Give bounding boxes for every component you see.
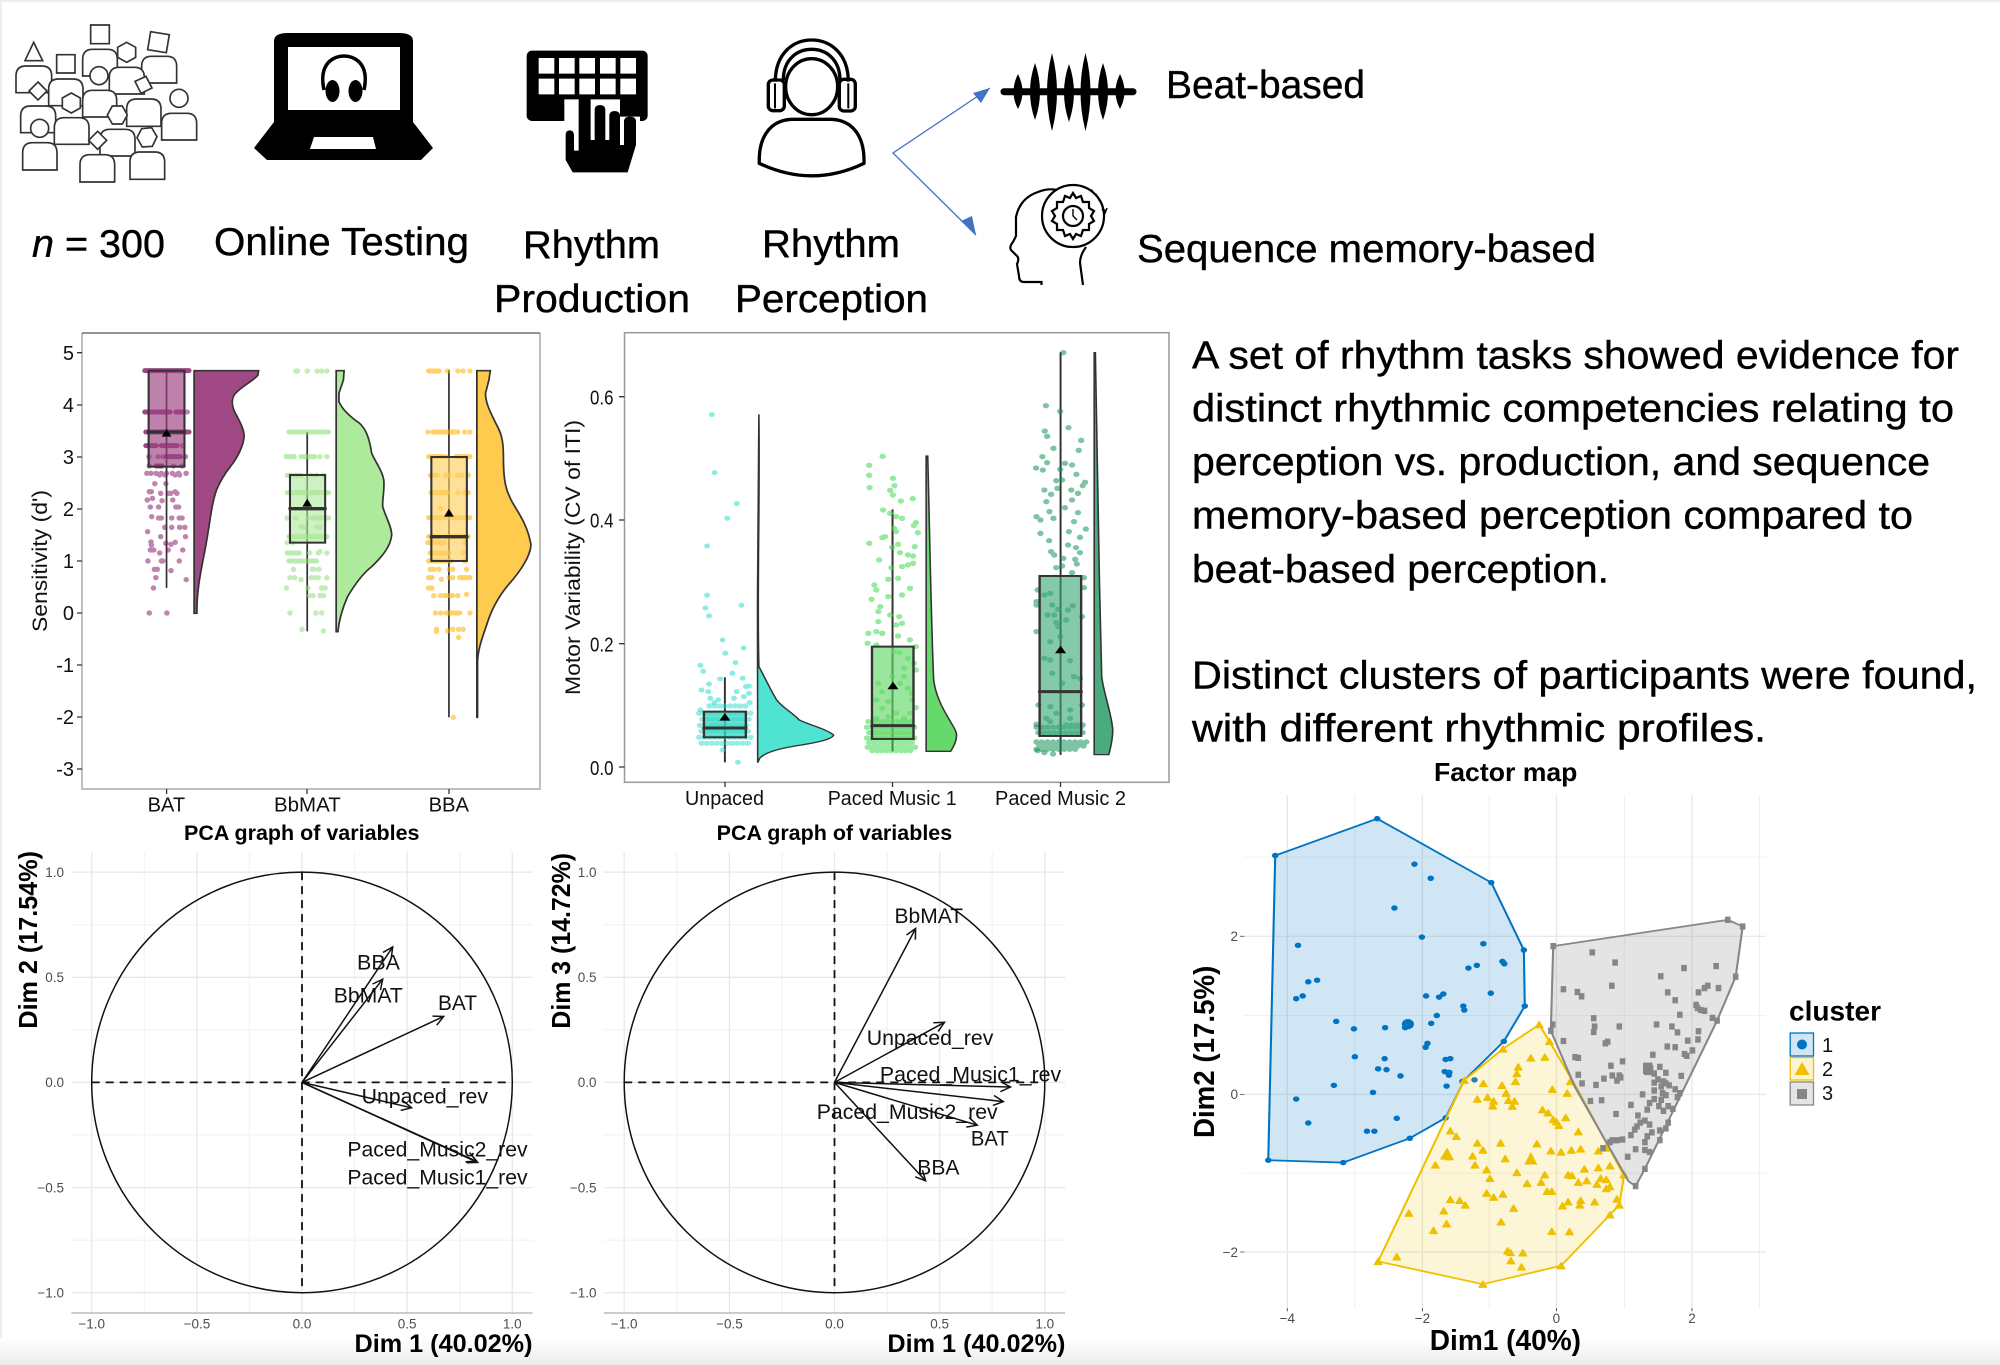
chart title: PCA graph of variables: [184, 822, 420, 845]
label: beat-based: Beat-based: [1166, 64, 1365, 107]
icon: laptop with headphones: [254, 33, 433, 160]
tick labels: 1.0: [1035, 1316, 1054, 1332]
tick labels: 0.5: [578, 970, 596, 985]
x axis labels: Paced Music 1: [828, 788, 957, 810]
icon: person with headphones: [759, 40, 864, 176]
y axis ticks: 1: [63, 551, 74, 573]
y axis ticks: 3: [63, 447, 74, 469]
label: rhythm production: [494, 224, 690, 321]
legend: [1789, 996, 1881, 1105]
y axis ticks: 0.4: [590, 510, 614, 532]
tick labels: 0.5: [45, 970, 64, 985]
grid: [604, 852, 1065, 1313]
tick labels: 1.0: [45, 865, 64, 880]
text block: findings: [1192, 334, 1959, 591]
text block: findings: beat-based perception.: [1192, 548, 1609, 591]
tick labels: 0.5: [930, 1316, 949, 1332]
legend title: cluster: [1789, 996, 1881, 1027]
y axis ticks: 2: [63, 499, 74, 521]
label: sequence memory-based: Sequence memory-based: [1137, 228, 1596, 271]
Paced Music 2 group: [1036, 353, 1113, 755]
cluster 2: [1374, 1021, 1628, 1287]
variable labels: BbMAT: [894, 904, 963, 928]
legend key 2: 2: [1822, 1059, 1833, 1081]
label: rhythm production: Rhythm: [523, 224, 660, 267]
arrows: to beat-based and sequence memory: [893, 88, 990, 235]
label: rhythm perception: Rhythm: [762, 223, 900, 266]
chart frame: [624, 333, 1169, 782]
y axis ticks: [56, 343, 449, 794]
chart frame: [82, 333, 540, 789]
label: online testing: Online Testing: [214, 221, 469, 264]
chart: sensitivity raincloud: [29, 333, 540, 817]
text block: findings: distinct rhythmic competencies relating to: [1192, 388, 1954, 431]
variable labels: Paced_Music1_rev: [880, 1062, 1061, 1086]
variable labels: BBA: [357, 950, 401, 974]
variable labels: [334, 950, 528, 1189]
variable labels: BAT: [971, 1127, 1009, 1151]
x axis labels: Unpaced: [685, 788, 764, 810]
tick labels: 2: [1688, 1311, 1696, 1326]
tick labels: 1.0: [578, 865, 596, 880]
tick labels: −1.0: [611, 1316, 638, 1332]
text block: clusters: with different rhythmic profiles.: [1191, 708, 1766, 751]
y axis ticks: -3: [56, 759, 74, 781]
tick labels: [1223, 929, 1696, 1326]
icon: crowd of people: [16, 25, 197, 182]
tick labels: 0.0: [45, 1075, 64, 1090]
BAT group: [145, 371, 259, 613]
y axis label: Sensitivity (d'): [29, 490, 52, 632]
tick labels: −2: [1415, 1311, 1430, 1326]
x axis title: Dim1 (40%): [1430, 1325, 1581, 1357]
chart title: Factor map: [1434, 757, 1577, 787]
x axis labels: BbMAT: [274, 795, 341, 817]
variable labels: Paced_Music2_rev: [817, 1100, 998, 1124]
x axis labels: BBA: [429, 795, 470, 817]
tick labels: −1.0: [37, 1286, 64, 1300]
text block: clusters: [1191, 654, 1977, 751]
chart: factor map clusters: [1189, 757, 1881, 1357]
variable labels: BbMAT: [334, 984, 403, 1008]
y axis ticks: 0.0: [590, 758, 614, 780]
chart: PCA Dim1 vs Dim2: [13, 822, 533, 1358]
variable labels: Unpaced_rev: [362, 1084, 488, 1108]
tick labels: −4: [1280, 1311, 1295, 1326]
label: rhythm perception: Perception: [735, 278, 928, 321]
x axis labels: BAT: [148, 795, 185, 817]
tick labels: −0.5: [716, 1316, 743, 1332]
cluster 3: [1548, 920, 1745, 1186]
variable labels: [817, 904, 1061, 1180]
icon: head with gear and clock: [1010, 185, 1107, 285]
x axis labels: [685, 788, 1126, 810]
tick labels: 0.0: [293, 1316, 311, 1332]
tick labels: 1.0: [503, 1316, 522, 1332]
x axis labels: Paced Music 2: [995, 788, 1126, 810]
tick labels: 0: [1553, 1311, 1560, 1326]
tick labels: −2: [1223, 1245, 1238, 1260]
variable labels: Paced_Music1_rev: [347, 1165, 528, 1189]
x axis title: Dim 1 (40.02%): [354, 1330, 532, 1358]
text block: findings: memory-based perception compared to: [1192, 494, 1913, 537]
tick labels: [570, 865, 1054, 1332]
variable arrows: [834, 928, 1010, 1181]
chart: PCA Dim1 vs Dim3: [546, 822, 1065, 1358]
variable labels: Unpaced_rev: [867, 1026, 994, 1050]
tick labels: 0.0: [578, 1075, 596, 1090]
legend key 1: 1: [1822, 1035, 1833, 1057]
chart title: PCA graph of variables: [717, 822, 952, 845]
x axis labels: [148, 795, 470, 817]
label: rhythm production: Production: [494, 278, 690, 321]
BbMAT group: [286, 371, 392, 632]
BBA group: [428, 371, 531, 717]
Unpaced group: [699, 414, 834, 763]
tick labels: [37, 865, 522, 1332]
y axis ticks: 4: [63, 395, 74, 417]
x axis title: Dim 1 (40.02%): [887, 1330, 1065, 1358]
text block: findings: perception vs. production, and sequence: [1192, 441, 1930, 484]
y axis ticks: 0.2: [590, 634, 614, 656]
label: rhythm perception: [735, 223, 928, 321]
tick labels: −0.5: [570, 1180, 596, 1196]
y axis title: Dim2 (17.5%): [1189, 966, 1221, 1138]
y axis ticks: [590, 388, 1060, 787]
grid: [1240, 795, 1766, 1311]
legend key 3: 3: [1822, 1083, 1833, 1105]
text block: clusters: Distinct clusters of participants were found,: [1192, 654, 1977, 697]
tick labels: −0.5: [184, 1316, 210, 1332]
grid: [71, 852, 533, 1313]
tick labels: 2: [1230, 929, 1238, 944]
y axis ticks: 0: [63, 603, 74, 625]
tick labels: −1.0: [78, 1316, 105, 1332]
icon: keyboard and hand: [527, 51, 648, 172]
text block: findings: A set of rhythm tasks showed evidence for: [1192, 334, 1959, 377]
variable labels: BAT: [438, 991, 477, 1015]
y axis title: Dim 3 (14.72%): [546, 853, 576, 1029]
variable labels: Paced_Music2_rev: [347, 1138, 528, 1162]
label: n = 300: n = 300: [32, 223, 165, 266]
tick labels: 0.5: [398, 1316, 417, 1332]
y axis ticks: 0.6: [590, 388, 614, 410]
variable arrows: [302, 947, 478, 1162]
y axis title: Dim 2 (17.54%): [13, 851, 43, 1029]
icon: sound wave: [1004, 53, 1133, 131]
y axis ticks: 5: [63, 343, 74, 365]
Paced Music 1 group: [867, 456, 957, 751]
y axis ticks: -1: [56, 655, 74, 677]
tick labels: 0: [1230, 1087, 1238, 1102]
y axis ticks: -2: [56, 707, 74, 729]
y axis label: Motor Variability (CV of ITI): [562, 420, 585, 695]
chart: motor variability raincloud: [562, 333, 1169, 810]
variable labels: BBA: [917, 1156, 960, 1180]
tick labels: −0.5: [37, 1180, 64, 1196]
tick labels: 0.0: [825, 1316, 844, 1332]
correlation circle: [92, 872, 512, 1293]
cluster 1: [1268, 819, 1525, 1163]
correlation circle: [624, 872, 1045, 1293]
tick labels: −1.0: [570, 1286, 596, 1300]
